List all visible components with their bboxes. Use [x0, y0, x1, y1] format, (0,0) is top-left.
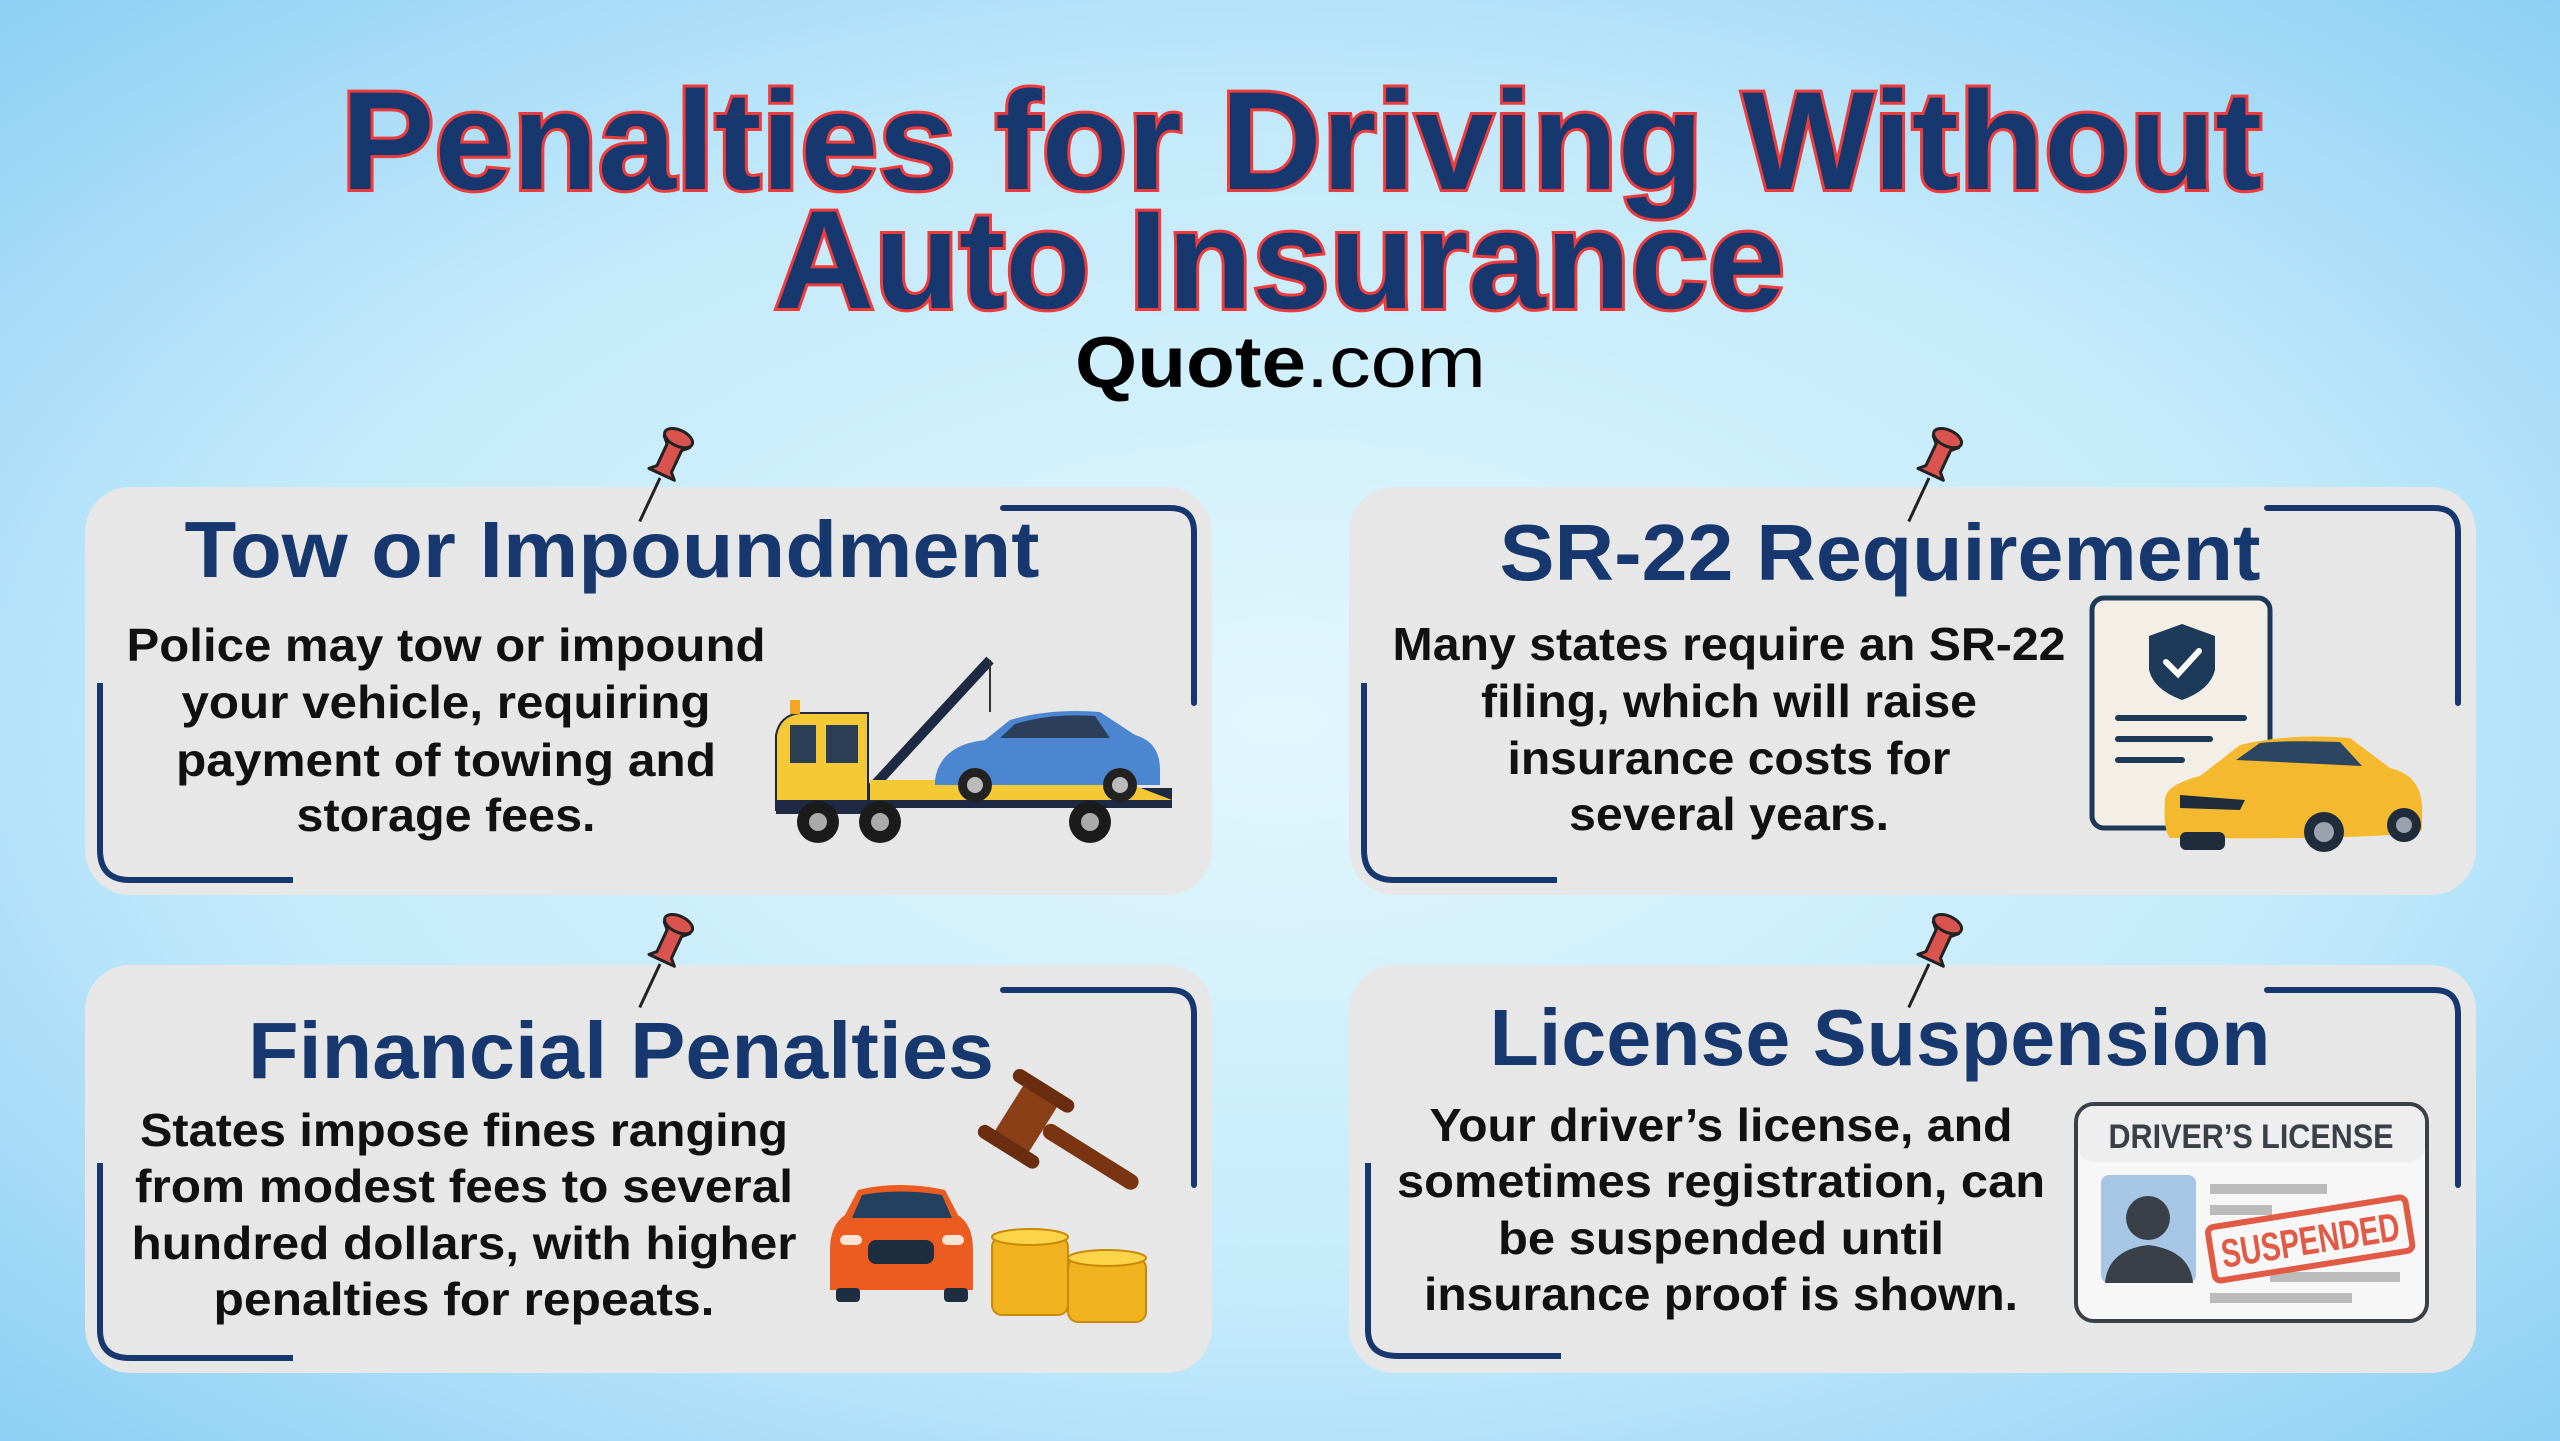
- icon: suspended driver's license: SUSPENDED: [2218, 1205, 2403, 1277]
- icon: pin 2: [1895, 425, 1965, 528]
- text block: from modest fees to several: [135, 1160, 793, 1212]
- text block: several years.: [1569, 788, 1889, 840]
- panel: financial penalties: [85, 965, 1212, 1373]
- text block: penalties for repeats.: [214, 1273, 714, 1325]
- heading: SR-22 Requirement: [1500, 508, 2260, 597]
- text block: filing, which will raise: [1481, 675, 1977, 727]
- text block: payment of towing and: [176, 734, 716, 786]
- icon: suspended driver's license: [2076, 1104, 2427, 1321]
- text block: insurance costs for: [1508, 732, 1951, 784]
- panel: tow or impoundment: [85, 487, 1212, 895]
- panel: license suspension: [1349, 965, 2476, 1373]
- text block: insurance proof is shown.: [1424, 1268, 2018, 1320]
- icon: suspended driver's license: DRIVER’S LICENSE: [2108, 1118, 2394, 1156]
- heading: Tow or Impoundment: [184, 505, 1040, 594]
- logo: Quote.com: Quote: [1075, 323, 1306, 403]
- logo: Quote.com: [1075, 323, 1486, 403]
- heading: Financial Penalties: [248, 1006, 994, 1095]
- icon: orange car, gavel and coins: [830, 1066, 1158, 1322]
- text block: [126, 619, 766, 841]
- text block: [1397, 1099, 2045, 1320]
- text block: your vehicle, requiring: [182, 676, 710, 728]
- panel: SR-22 requirement: [1349, 487, 2476, 895]
- icon: pin 3: [626, 911, 696, 1014]
- text block: Many states require an SR-22: [1392, 618, 2066, 670]
- icon: document with shield and yellow car: [2092, 598, 2422, 852]
- text block: [1392, 618, 2066, 840]
- heading: License Suspension: [1490, 993, 2270, 1082]
- text block: storage fees.: [296, 789, 596, 841]
- text block: Your driver’s license, and: [1430, 1099, 2012, 1151]
- text block: [132, 1104, 797, 1325]
- icon: tow truck: [776, 660, 1172, 843]
- title: [341, 62, 2262, 338]
- logo: Quote.com: .com: [1306, 323, 1486, 403]
- title: Penalties for Driving Without: [341, 62, 2262, 219]
- text block: hundred dollars, with higher: [132, 1217, 797, 1269]
- icon: pin 1: [626, 425, 696, 528]
- text block: be suspended until: [1498, 1212, 1944, 1264]
- text block: States impose fines ranging: [140, 1104, 788, 1156]
- title: Auto Insurance: [774, 181, 1785, 338]
- text block: Police may tow or impound: [126, 619, 766, 671]
- text block: sometimes registration, can: [1397, 1155, 2045, 1207]
- icon: pin 4: [1895, 911, 1965, 1014]
